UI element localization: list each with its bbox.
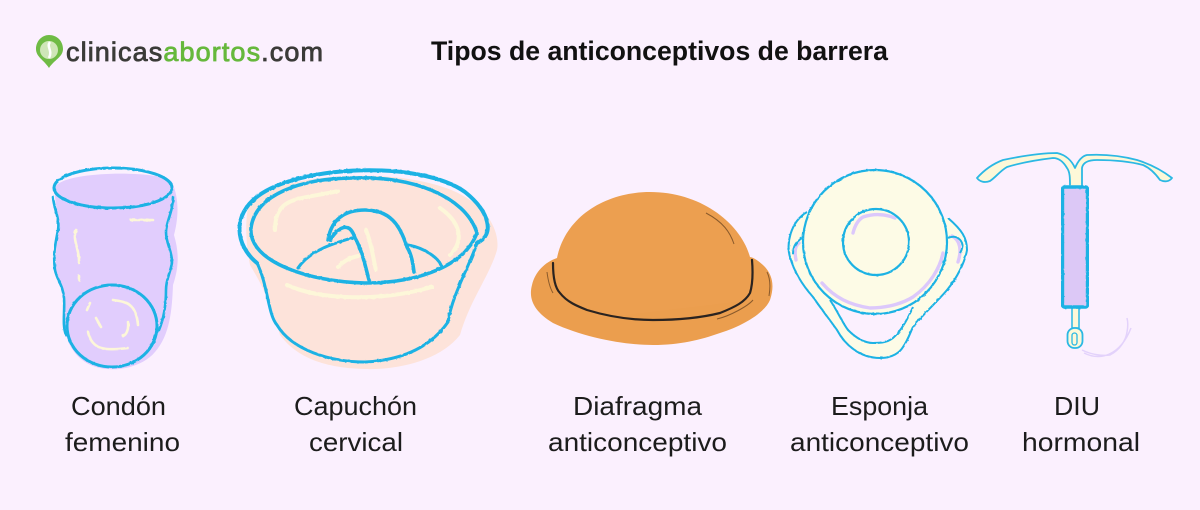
title: Tipos de anticonceptivos de barrera — [431, 36, 888, 66]
lavender shading — [795, 214, 960, 308]
iud hormone cylinder — [1062, 187, 1088, 307]
label: esponja anticonceptivo: Esponja — [831, 391, 929, 421]
logo text: clinicasabortos.com — [66, 37, 323, 67]
label: capuchón cervical: cervical — [309, 427, 403, 457]
cap fill — [246, 176, 498, 369]
diaphragm brim — [531, 257, 772, 345]
diaphragm dark ring — [553, 260, 753, 320]
sponge inner strap background — [830, 300, 913, 343]
iud stem — [1072, 308, 1079, 328]
label: condón femenino: femenino — [65, 427, 180, 457]
label: DIU hormonal — [1022, 391, 1140, 457]
iud thread — [1082, 318, 1131, 356]
sponge outer strap — [789, 212, 967, 358]
condom bottom ring — [67, 285, 157, 367]
sponge strap fill — [789, 212, 967, 358]
diaphragm thin marks — [547, 213, 770, 319]
condom top ring — [54, 168, 172, 208]
label: DIU hormonal: DIU — [1054, 391, 1100, 421]
sponge inner strap — [830, 300, 913, 343]
sponge inner circle — [843, 209, 909, 275]
iud loop hole — [1072, 333, 1077, 345]
sponge side loops — [793, 237, 962, 254]
label: esponja anticonceptivo: anticonceptivo — [790, 427, 969, 457]
icon: green map pin — [36, 35, 63, 68]
label: esponja anticonceptivo — [790, 391, 969, 457]
cap inner rim — [251, 178, 477, 283]
label: condón femenino — [65, 391, 180, 457]
illustration: capuchón cervical — [239, 170, 498, 369]
label: diafragma anticonceptivo: anticonceptivo — [548, 427, 727, 457]
sponge disc fill — [803, 170, 947, 314]
illustration: condón femenino — [53, 168, 178, 369]
label: diafragma anticonceptivo: Diafragma — [573, 391, 703, 421]
inner knob — [298, 238, 441, 268]
inner strap — [328, 210, 414, 280]
sponge outer circle — [803, 170, 947, 314]
illustration: esponja anticonceptivo — [789, 170, 967, 358]
cap bowl — [257, 243, 477, 362]
label: DIU hormonal: hormonal — [1022, 427, 1140, 457]
iud arms — [977, 153, 1172, 187]
condom body outline — [53, 197, 173, 335]
label: condón femenino: Condón — [71, 391, 166, 421]
diaphragm dome — [555, 192, 752, 318]
illustration: DIU hormonal — [977, 153, 1172, 356]
label: diafragma anticonceptivo — [548, 391, 727, 457]
logo: clinicasabortos.com — [36, 35, 323, 68]
condom highlights — [75, 220, 153, 349]
cap highlights — [275, 191, 459, 297]
illustration: diafragma anticonceptivo — [531, 192, 772, 345]
iud loop — [1068, 328, 1082, 348]
cap outer rim — [239, 170, 488, 263]
label: capuchón cervical — [294, 391, 417, 457]
label: capuchón cervical: Capuchón — [294, 391, 417, 421]
condom fill — [55, 174, 178, 369]
